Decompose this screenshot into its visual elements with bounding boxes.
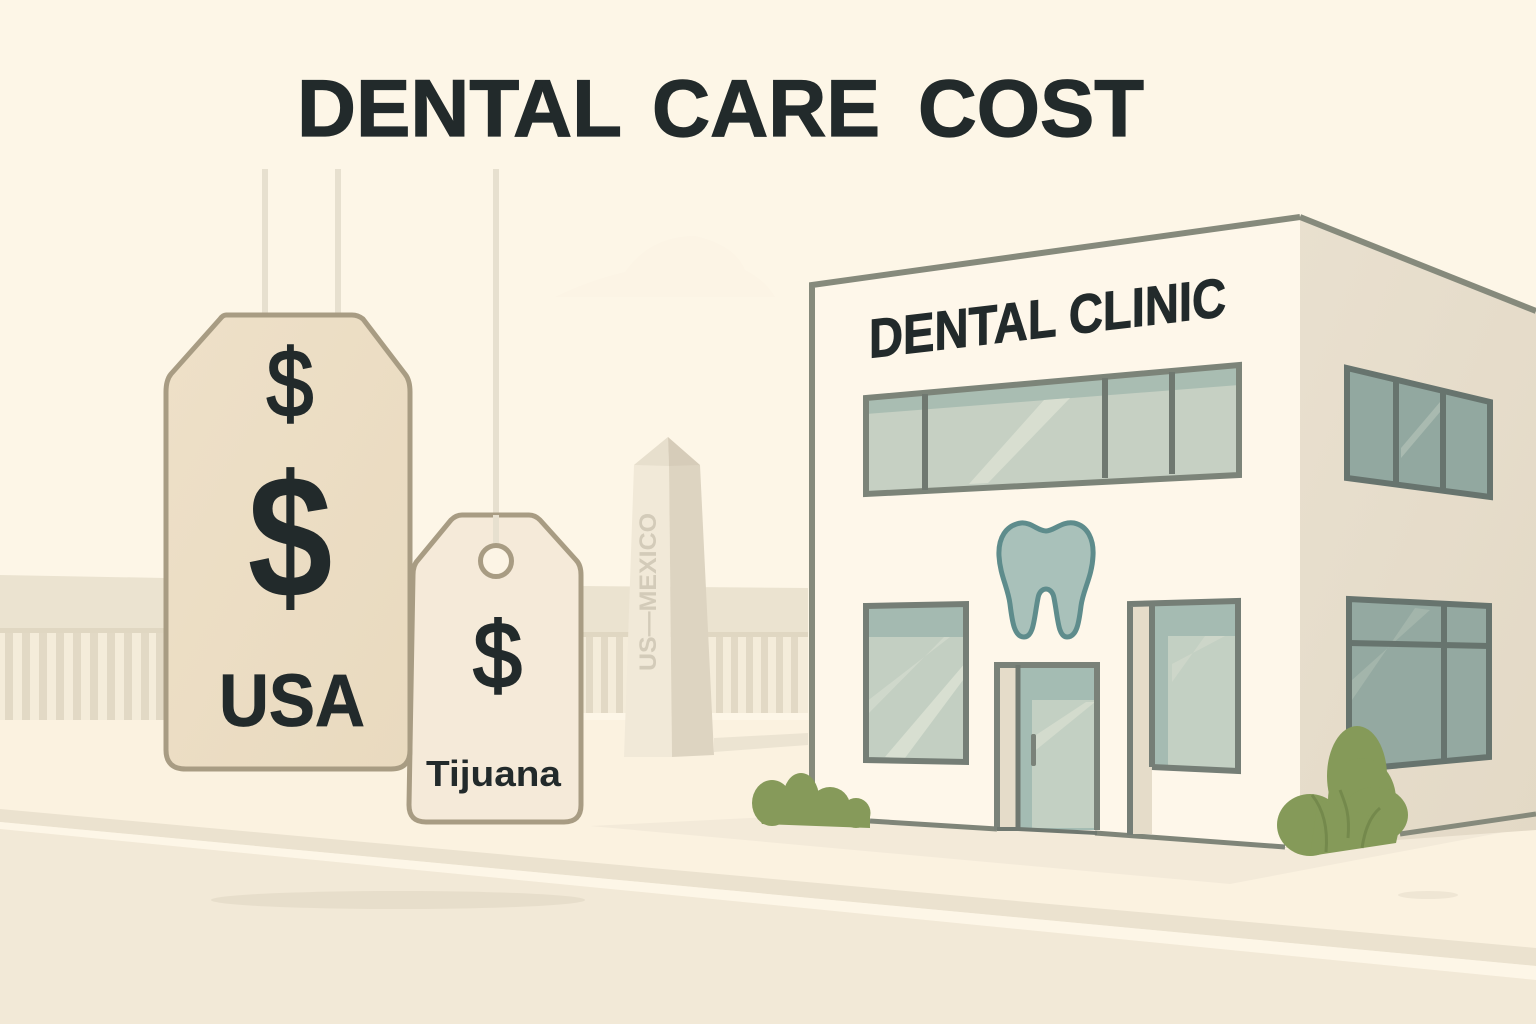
dental clinic building xyxy=(752,217,1536,856)
tag label: Tijuana xyxy=(426,753,562,794)
border obelisk xyxy=(624,437,714,757)
front wall xyxy=(812,219,1300,848)
small dollar sign: $ xyxy=(267,330,313,437)
title: DENTAL xyxy=(297,64,622,154)
title xyxy=(297,64,1144,154)
left shrub xyxy=(752,773,870,828)
title: COST xyxy=(918,64,1144,154)
strings xyxy=(262,169,499,519)
upper front window xyxy=(866,365,1239,494)
lower left window xyxy=(866,604,966,762)
upper side window xyxy=(1347,368,1490,497)
tag price symbol: $ xyxy=(473,604,522,708)
road shadow xyxy=(211,891,585,909)
lower right window xyxy=(1130,601,1238,835)
border fence xyxy=(0,575,808,752)
side wall xyxy=(1285,219,1536,848)
icon: tooth xyxy=(999,523,1093,637)
door handle xyxy=(1031,734,1036,766)
large dollar sign: $ xyxy=(248,439,332,634)
title: CARE xyxy=(652,64,880,154)
lower side window xyxy=(1349,599,1489,770)
tag hole xyxy=(480,546,512,576)
street and curb xyxy=(0,809,1536,1024)
price tag: Tijuana xyxy=(409,515,581,822)
price tag: USA xyxy=(166,315,410,769)
entrance door xyxy=(997,665,1097,833)
clinic sign: DENTAL CLINIC xyxy=(869,266,1226,370)
obelisk label: US—MEXICO xyxy=(635,513,662,671)
right shrub xyxy=(1277,726,1408,856)
tag label: USA xyxy=(219,659,365,742)
